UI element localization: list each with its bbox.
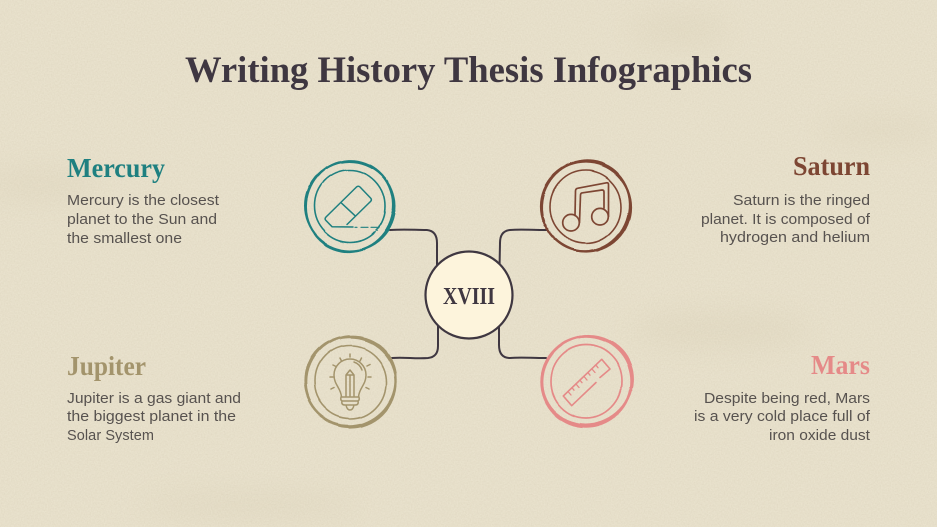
- heading: Jupiter: Jupiter: [67, 351, 146, 381]
- icon: Saturn music note seal: [525, 144, 647, 268]
- text: Jupiter description: Solar System: [67, 428, 154, 444]
- text: Saturn description: hydrogen and helium: [720, 230, 870, 246]
- text: Saturn description: planet. It is composed of: [701, 212, 871, 228]
- icon: Mercury eraser seal: [293, 148, 407, 265]
- text: Jupiter description: Jupiter is a gas giant and: [67, 391, 241, 407]
- text: Mercury description: [67, 193, 219, 247]
- panel: Jupiter text: [67, 351, 241, 444]
- text: Jupiter description: [67, 391, 241, 444]
- connector lines: [390, 230, 547, 358]
- central node: [426, 252, 512, 338]
- panel: Saturn text: [701, 151, 871, 246]
- text: Mars description: Despite being red, Mars: [704, 391, 870, 407]
- text: Saturn description: Saturn is the ringed: [733, 193, 870, 209]
- central label: XVIII: [443, 284, 495, 310]
- text: Mars description: [694, 391, 871, 444]
- heading: Saturn: Saturn: [793, 151, 870, 181]
- title: Writing History Thesis Infographics: [185, 50, 752, 91]
- heading: Mars: Mars: [811, 350, 870, 380]
- text: Mercury description: Mercury is the closest: [67, 193, 219, 209]
- heading: Mercury: Mercury: [67, 153, 165, 183]
- panel: Mercury text: [67, 153, 219, 247]
- text: Mars description: iron oxide dust: [769, 428, 870, 444]
- icon: Jupiter light bulb seal: [287, 317, 414, 444]
- text: Jupiter description: the biggest planet in the: [67, 409, 236, 425]
- panel: Mars text: [694, 350, 871, 444]
- icon: Mars ruler seal: [529, 323, 645, 437]
- text: Mercury description: the smallest one: [67, 231, 182, 247]
- text: Mars description: is a very cold place full of: [694, 409, 871, 425]
- text: Saturn description: [701, 193, 871, 246]
- text: Mercury description: planet to the Sun and: [67, 212, 217, 228]
